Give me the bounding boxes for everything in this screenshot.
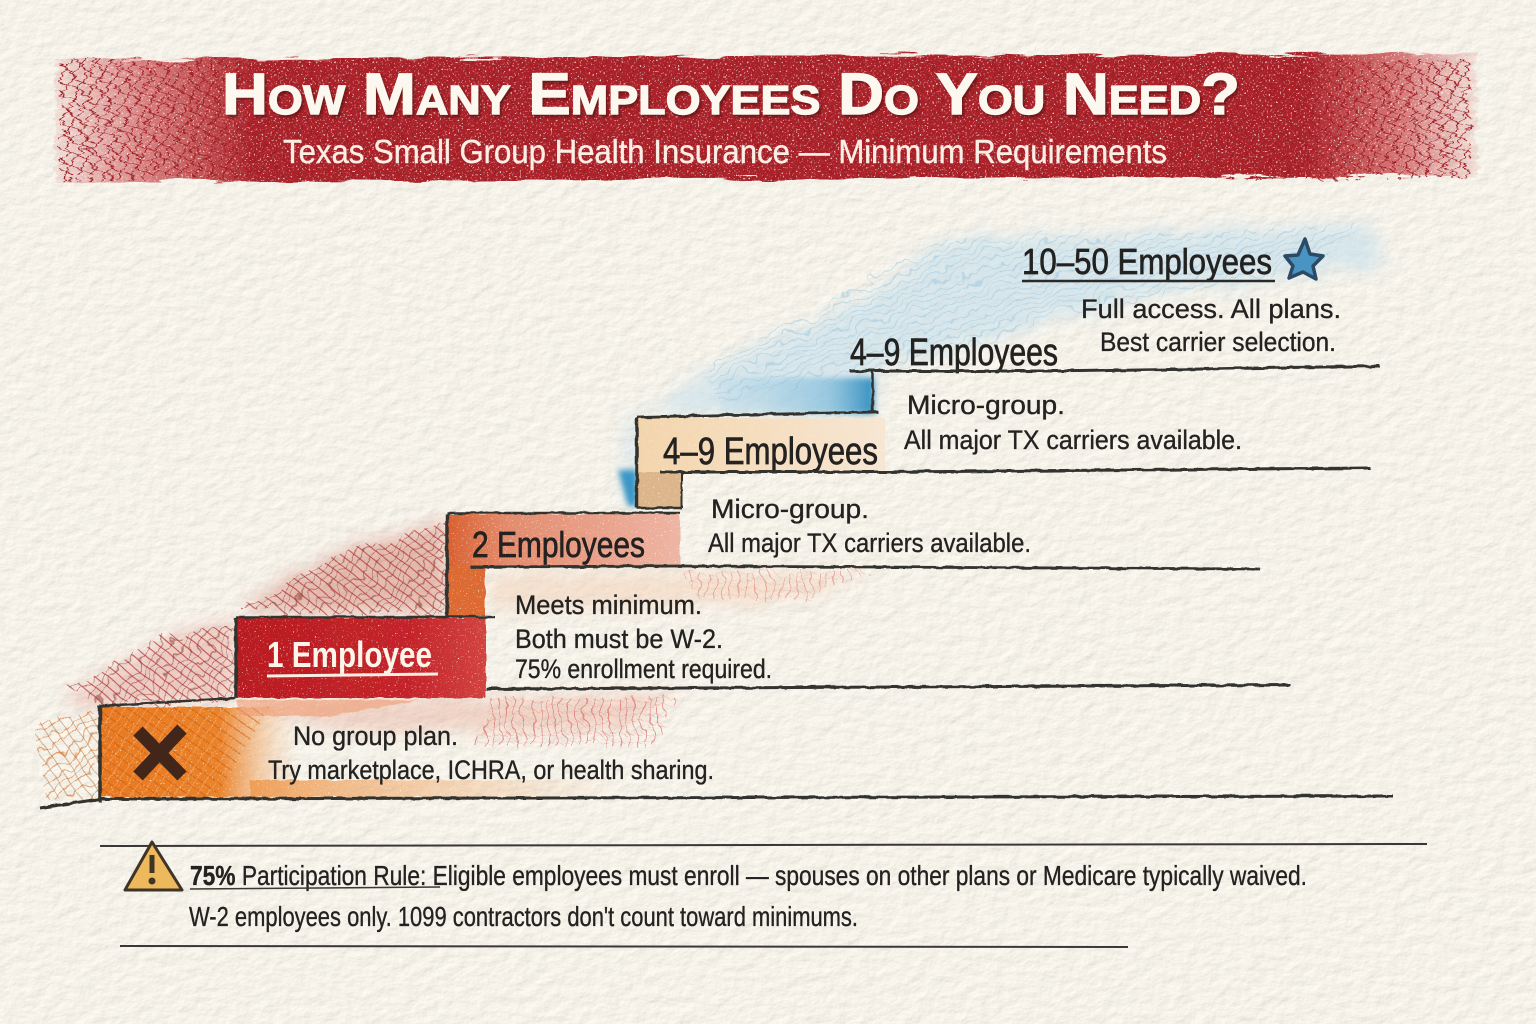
description: No group plan.: [293, 721, 458, 751]
top divider: [100, 844, 1427, 846]
step label: 2 Employees: [472, 524, 645, 565]
description: [904, 390, 1242, 455]
step label: 1 Employee: [267, 634, 432, 675]
description: [1081, 294, 1341, 357]
description: Full access. All plans.: [1081, 294, 1341, 324]
icon: X mark: [138, 729, 182, 776]
description: 75% enrollment required.: [515, 654, 772, 684]
step 5: ten to fifty employees: [1022, 239, 1323, 282]
step block: orange: [100, 700, 620, 797]
step label: 10–50 Employees: [1022, 241, 1272, 282]
description: Meets minimum.: [515, 590, 702, 620]
title: How Many Employees Do You Need?: [222, 62, 1240, 127]
description: All major TX carriers available.: [708, 528, 1031, 558]
stray pencil hatching: [38, 225, 1370, 800]
description: Try marketplace, ICHRA, or health sharing.: [268, 755, 714, 785]
stair lines: [40, 366, 1393, 808]
background wash: blue and red: [70, 225, 1385, 730]
step label: 4–9 Employees: [850, 332, 1058, 374]
step label: 4–9 Employees: [663, 431, 878, 473]
step block: red: [236, 618, 486, 698]
description: Best carrier selection.: [1100, 327, 1336, 357]
step 1: one employee: [236, 590, 772, 698]
note line 2: W-2 employees only. 1099 contractors don't count toward minimums.: [189, 901, 858, 932]
description: [708, 494, 1031, 558]
title banner: [55, 53, 1478, 182]
step 2: two employees: [447, 494, 1031, 616]
bottom divider: [120, 946, 1128, 947]
step 4: four to nine employees upper: [850, 294, 1341, 374]
step 0: no group plan: [100, 700, 714, 797]
step block: tan: [637, 418, 885, 508]
description: Micro-group.: [907, 390, 1065, 420]
note line 1: 75% Participation Rule: Eligible employees must enroll — spouses on other plans or Medicare typically waived.: [190, 860, 1307, 891]
step block: salmon: [447, 514, 680, 616]
subtitle: Texas Small Group Health Insurance — Minimum Requirements: [283, 133, 1167, 170]
description: [515, 590, 772, 684]
description: Micro-group.: [711, 494, 869, 524]
blue accent behind steps: [618, 378, 874, 506]
step 3: four to nine employees: [637, 390, 1242, 508]
icon: blue star: [1285, 239, 1323, 279]
banner: red hatched band: [55, 53, 1478, 182]
icon: warning triangle: [125, 842, 182, 890]
participation rule note: [100, 842, 1427, 947]
description: All major TX carriers available.: [904, 425, 1242, 455]
description: [268, 721, 714, 785]
description: Both must be W-2.: [515, 624, 723, 654]
